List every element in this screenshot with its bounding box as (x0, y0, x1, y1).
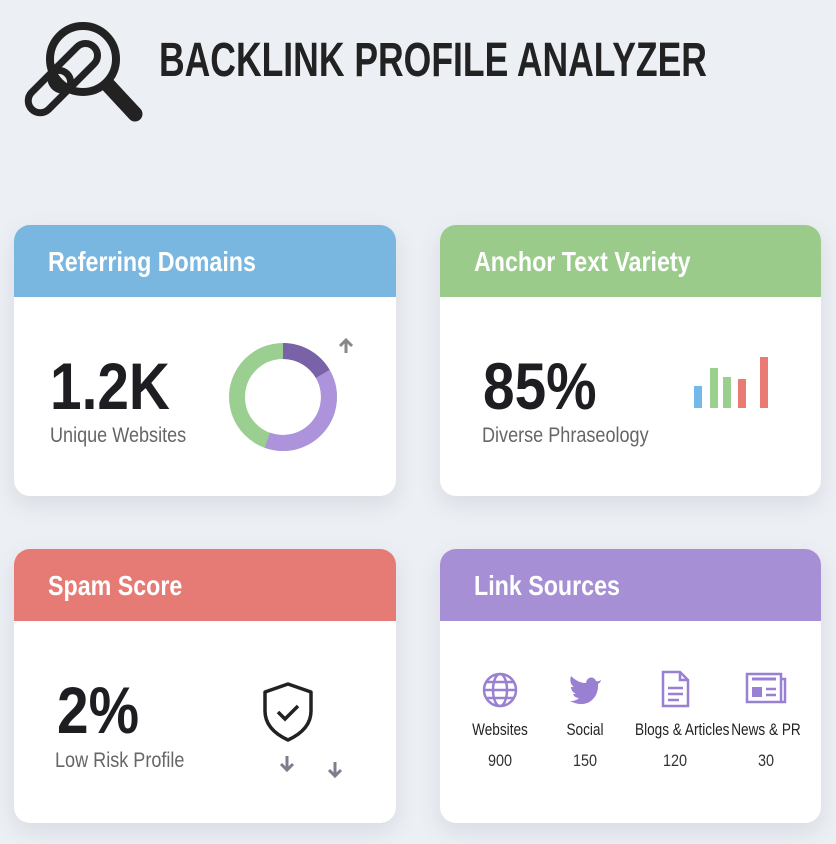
heading: anchor text variety: Anchor Text Variety (474, 246, 691, 277)
source: websites (472, 672, 528, 770)
panel: spam score (14, 549, 396, 823)
heading: referring domains: Referring Domains (48, 246, 256, 277)
arrows down (280, 756, 342, 778)
heading: anchor text variety (440, 225, 821, 297)
heading: spam score (14, 549, 396, 621)
bar chart (694, 357, 768, 408)
heading: referring domains (14, 225, 396, 297)
label unique websites: Unique Websites (50, 424, 186, 447)
panel: referring domains (14, 225, 396, 496)
panel: link sources: Blogs & Articles (635, 720, 729, 739)
source: news and pr (731, 672, 801, 770)
label low risk profile: Low Risk Profile (55, 749, 184, 772)
panel: link sources: 30 (758, 751, 774, 770)
value 85%: 85% (483, 349, 597, 423)
heading: link sources: Link Sources (474, 570, 620, 601)
panel: link sources: 900 (488, 751, 512, 770)
icon: shield check (263, 682, 313, 742)
panel: anchor text variety (440, 225, 821, 496)
label diverse phraseology: Diverse Phraseology (482, 424, 649, 447)
panel: link sources: 120 (663, 751, 687, 770)
icon: magnifier with link (24, 22, 142, 122)
value 2%: 2% (57, 673, 139, 747)
panel: link sources (440, 549, 821, 823)
source: social (566, 676, 604, 770)
source: blogs and articles (635, 670, 729, 770)
panel: link sources: Social (566, 720, 604, 739)
arrow up (340, 340, 352, 353)
donut chart (229, 338, 353, 451)
panel: link sources: 150 (573, 751, 597, 770)
panel: link sources: News & PR (731, 720, 801, 739)
heading: link sources (440, 549, 821, 621)
heading: spam score: Spam Score (48, 570, 182, 601)
value 1.2K: 1.2K (50, 349, 170, 423)
title: BACKLINK PROFILE ANALYZER (159, 34, 707, 87)
panel: link sources: Websites (472, 720, 528, 739)
